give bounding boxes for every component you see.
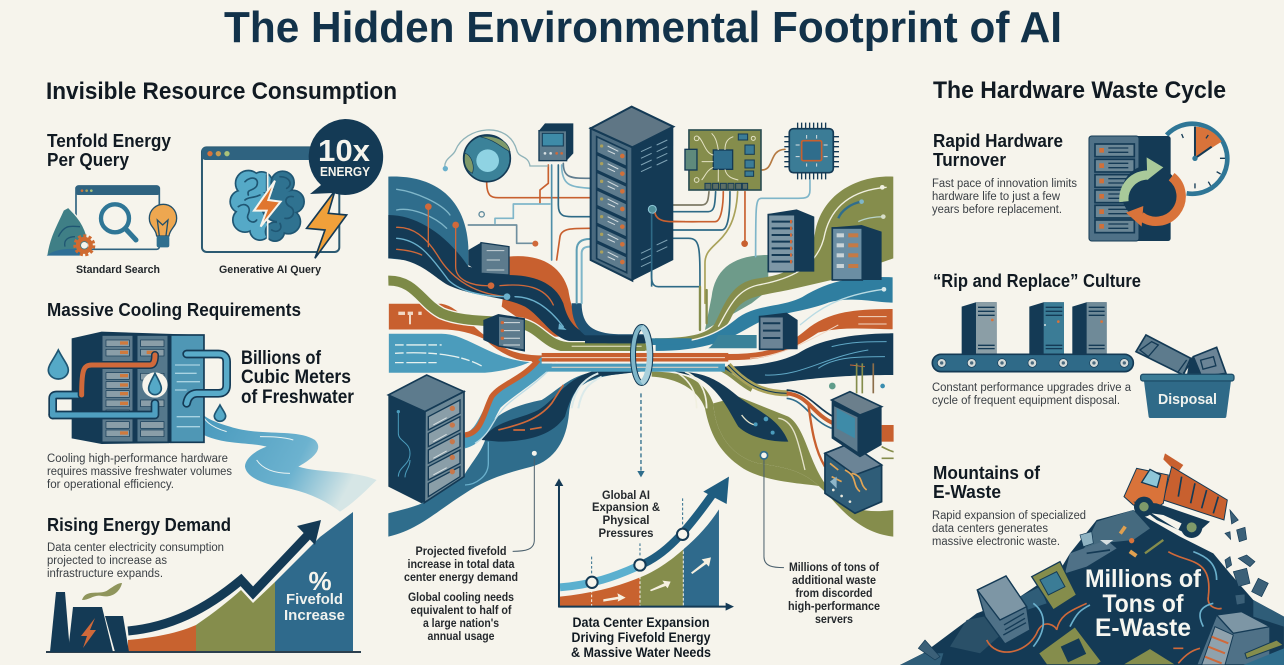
icon: small monitor device xyxy=(539,123,573,161)
callout: millions of tons additional waste: servers xyxy=(815,614,853,626)
subheading: tenfold energy per query: Tenfold Energy xyxy=(47,131,171,151)
badge: 10x energy: 10x xyxy=(318,133,371,168)
text: cooling description: Cooling high-performance hardware xyxy=(47,453,228,465)
label: millions of tons of e-waste: Millions of xyxy=(1085,565,1202,593)
debris: server rack xyxy=(1197,612,1284,665)
badge: 10x energy xyxy=(309,119,383,195)
text: cooling description: for operational efficiency. xyxy=(47,479,174,491)
label: global AI expansion: Physical xyxy=(602,515,650,527)
subheading: rip and replace culture: “Rip and Replace” Culture xyxy=(933,271,1141,291)
callout: millions of tons additional waste: high-performance xyxy=(788,601,880,613)
wires network xyxy=(468,149,810,330)
label: global AI expansion: Global AI xyxy=(602,490,650,502)
subheading: mountains of e-waste: Mountains of xyxy=(933,463,1041,483)
debris: circuit boards xyxy=(1032,562,1177,665)
chart: fivefold increase area with arrow: Fivefold xyxy=(286,591,343,608)
streams: lower bands xyxy=(388,360,894,537)
heading: invisible resource consumption: Invisible Resource Consumption xyxy=(46,78,397,105)
streams: right bands xyxy=(655,177,893,390)
icon: lower-right monitor and device xyxy=(825,392,882,513)
callout: millions of tons additional waste: from discorded xyxy=(796,588,872,600)
subheading: rapid hardware turnover: Turnover xyxy=(933,150,1006,170)
fivefold label: % xyxy=(308,566,332,596)
text: e-waste description: data centers generates xyxy=(932,523,1048,535)
callout: global cooling needs: annual usage xyxy=(428,631,494,643)
label: disposal: Disposal xyxy=(1158,391,1217,408)
icon: small server left xyxy=(468,243,509,275)
text: e-waste description: Rapid expansion of specialized xyxy=(932,510,1086,522)
factory icon xyxy=(50,583,129,652)
icon: lower-left server rack xyxy=(388,375,464,503)
panel: central data streams xyxy=(388,107,894,660)
callout: millions of tons additional waste: additional waste xyxy=(792,575,876,587)
debris: small fragments xyxy=(918,510,1268,660)
text: upgrades description: cycle of frequent equipment disposal. xyxy=(932,395,1120,407)
leader lines xyxy=(513,450,784,568)
callout: global cooling needs: a large nation's xyxy=(423,618,499,630)
caption: data center expansion: Driving Fivefold Energy xyxy=(572,629,711,645)
chart: fivefold increase area with arrow xyxy=(46,512,361,653)
icon: globe xyxy=(443,130,548,182)
callout: billions of cubic meters of freshwater: Billions of xyxy=(241,348,322,369)
callout: billions of cubic meters of freshwater: of Freshwater xyxy=(241,387,355,408)
label: standard search: Standard Search xyxy=(76,264,160,276)
subheading: tenfold energy per query: Per Query xyxy=(47,150,129,170)
caption: data center expansion: & Massive Water Needs xyxy=(571,644,711,660)
debris: computer case xyxy=(977,576,1030,644)
icon: circuit board xyxy=(685,130,761,190)
text: turnover description: Fast pace of innovation limits xyxy=(932,178,1077,190)
subheading: mountains of e-waste: E-Waste xyxy=(933,482,1001,502)
icon: water drops xyxy=(48,350,226,421)
callout: global cooling needs: equivalent to half of xyxy=(410,605,512,617)
icon: server with clock and recycle arrows xyxy=(1089,124,1227,241)
callout: projected fivefold increase: increase in total data xyxy=(408,559,515,571)
chart: fivefold increase area with arrow: Increase xyxy=(284,607,345,624)
streams: left middle bands xyxy=(388,281,645,373)
callout: projected fivefold increase: center energy demand xyxy=(404,572,518,584)
caption: data center expansion: Data Center Expansion xyxy=(572,614,710,630)
label: global AI expansion: Expansion & xyxy=(592,502,660,514)
callout: projected fivefold increase: Projected fivefold xyxy=(416,546,506,558)
icon: server with cooling pipes xyxy=(53,332,227,444)
callout: global cooling needs: Global cooling needs xyxy=(408,592,514,604)
subheading: rapid hardware turnover: Rapid Hardware xyxy=(933,131,1063,151)
badge: 10x energy: ENERGY xyxy=(320,165,371,179)
label: generative AI query: Generative AI Query xyxy=(219,264,322,276)
icon: generative AI query window xyxy=(202,147,347,258)
dashed arrow xyxy=(637,393,645,477)
label: global AI expansion: Pressures xyxy=(598,528,654,540)
illustration: e-waste pile and truck xyxy=(900,453,1284,665)
text: turnover description: hardware life to just a few xyxy=(932,191,1061,203)
text: rising energy description: projected to increase as xyxy=(47,555,167,567)
text: cooling description: requires massive freshwater volumes xyxy=(47,466,232,478)
text: rising energy description: infrastructure expands. xyxy=(47,568,163,580)
subheading: massive cooling requirements: Massive Cooling Requirements xyxy=(47,300,301,320)
icon: main server rack xyxy=(591,107,685,287)
bundle ring xyxy=(633,327,650,383)
heading: the hardware waste cycle: The Hardware Waste Cycle xyxy=(933,77,1226,104)
dump truck xyxy=(1124,453,1227,538)
subheading: rising energy demand: Rising Energy Demand xyxy=(47,515,231,535)
title: The Hidden Environmental Footprint of AI xyxy=(224,3,1062,52)
text: e-waste description: massive electronic waste. xyxy=(932,536,1060,548)
label: millions of tons of e-waste: E-Waste xyxy=(1095,614,1191,642)
icon: processor chip xyxy=(784,123,839,179)
icon: right servers xyxy=(759,209,882,349)
icon: server towers on conveyor xyxy=(932,302,1133,372)
icon: disposal bin xyxy=(1136,335,1234,417)
callout: millions of tons additional waste: Millions of tons of xyxy=(789,562,879,574)
icon: standard search window xyxy=(47,186,177,256)
panel: the hardware waste cycle xyxy=(900,77,1284,665)
panel: invisible resource consumption xyxy=(46,78,397,653)
callout: billions of cubic meters of freshwater: Cubic Meters xyxy=(241,367,351,388)
streams: central bundle xyxy=(538,335,728,372)
chart: data center expansion curve xyxy=(555,477,734,611)
river flowing from server xyxy=(180,400,377,512)
text: rising energy description: Data center electricity consumption xyxy=(47,542,224,554)
text: upgrades description: Constant performance upgrades drive a xyxy=(932,382,1132,394)
text: turnover description: years before replacement. xyxy=(932,204,1062,216)
streams: left upper bands xyxy=(388,177,642,348)
label: millions of tons of e-waste: Tons of xyxy=(1102,590,1184,618)
